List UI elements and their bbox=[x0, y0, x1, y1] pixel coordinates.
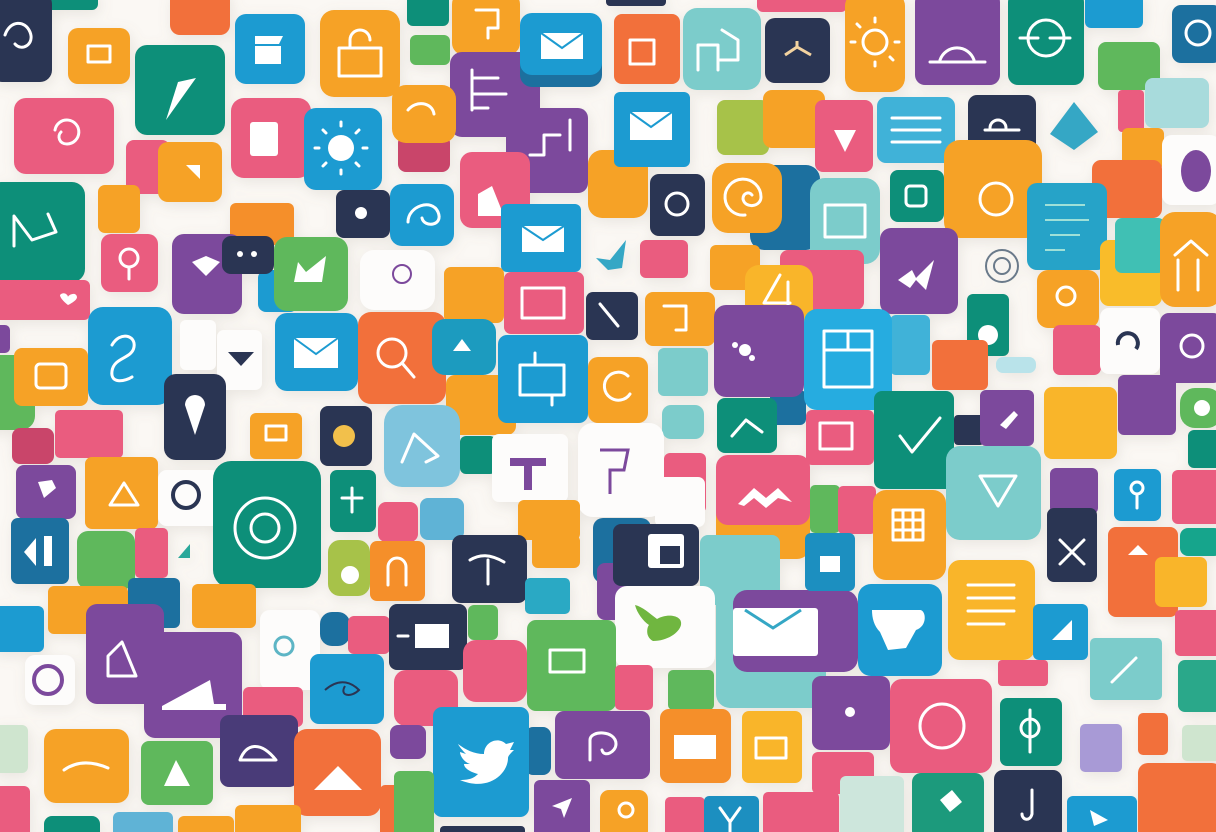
tile: dark blue back 2 bbox=[770, 390, 806, 425]
tile: orange columns bbox=[1160, 212, 1216, 307]
tile: orange building bbox=[444, 267, 504, 323]
tile: orange arch bbox=[370, 541, 425, 601]
tile: green bottom bbox=[394, 771, 434, 832]
tile: teal light 2 bbox=[662, 405, 704, 439]
tile: white spiral bbox=[1100, 308, 1160, 374]
tile: orange spiral bbox=[712, 163, 782, 233]
tile: purple list bbox=[450, 52, 540, 137]
tile: white molecule bbox=[260, 610, 320, 690]
tile: green check large bbox=[874, 391, 954, 489]
tile: pink doc bbox=[231, 98, 311, 178]
tile: blue mail bbox=[520, 13, 602, 87]
tile: white arrow bbox=[655, 477, 705, 527]
tile: blue swirl 3 bbox=[310, 654, 384, 724]
tile: blue swirl large bbox=[88, 307, 172, 405]
tile: white hammer bbox=[492, 434, 568, 502]
tile: yellow right bbox=[1155, 557, 1207, 607]
tile: white ring bbox=[158, 470, 220, 526]
tile: purple ship bbox=[144, 632, 242, 738]
tile: purple arc bbox=[915, 0, 1000, 85]
tile: orange small bbox=[763, 90, 825, 148]
tile: blue back bbox=[258, 270, 298, 312]
tile: navy pin bbox=[164, 374, 226, 460]
tile: navy hanger bbox=[765, 18, 830, 83]
tile: green small 11 bbox=[668, 670, 714, 710]
tile: green message bbox=[1098, 42, 1160, 90]
tile: yellow curl bbox=[392, 85, 456, 143]
tile: purple wifi bbox=[172, 234, 242, 314]
tile: orange chest bbox=[14, 348, 88, 406]
tile: navy swirl bbox=[0, 0, 52, 82]
tile: pale left edge bbox=[0, 725, 28, 773]
tile: orange right bbox=[1108, 527, 1178, 617]
tile: twitter bird bbox=[433, 707, 529, 817]
tile: orange card 2 bbox=[660, 709, 731, 783]
tile: light teal triangle bbox=[946, 446, 1041, 540]
tile: navy tree bbox=[452, 535, 527, 603]
tile: light blue back bbox=[890, 315, 930, 375]
tile: green edge 2 bbox=[1178, 660, 1216, 712]
tile: purple chart bbox=[506, 108, 588, 193]
tile: purple tower bbox=[86, 604, 164, 704]
tile: pink back 2 bbox=[780, 250, 864, 310]
tile: pale blue small bbox=[420, 498, 464, 540]
icon: teal bird bbox=[596, 240, 626, 270]
tile: blue swirl bbox=[390, 184, 454, 246]
tile: dark blue back 3 bbox=[525, 727, 551, 775]
tile: teal bottom bbox=[44, 816, 100, 832]
tile: pink flat 2 bbox=[812, 752, 874, 794]
tile: pink back 3 bbox=[664, 453, 706, 513]
tile: blue sun bbox=[304, 108, 382, 190]
tile: teal small square bbox=[890, 170, 944, 222]
tile: pink cart bbox=[1053, 325, 1101, 375]
tile: green tiny bbox=[468, 605, 498, 640]
tile: light blue shape bbox=[384, 405, 460, 487]
tile: orange behind right bbox=[1100, 240, 1162, 306]
tile: navy toy bbox=[320, 406, 372, 466]
tile: small green bbox=[410, 35, 450, 65]
tile: red tile bbox=[1092, 160, 1162, 218]
tile: orange pink trend bbox=[716, 455, 810, 559]
tile: yellow dots bbox=[1044, 387, 1117, 459]
tile: orange bottom 2 bbox=[235, 805, 301, 832]
tile: purple ear bbox=[555, 711, 650, 779]
tile: orange tiny bbox=[1138, 713, 1168, 755]
tile: teal edge 2 bbox=[1180, 528, 1216, 556]
tile: purple pen bbox=[980, 390, 1034, 446]
tile: navy bottom bbox=[440, 826, 525, 832]
tile: pink left edge bbox=[0, 786, 30, 832]
tile: orange flat bbox=[48, 586, 128, 634]
tile: blue triangle bbox=[432, 319, 496, 375]
tile: orange bird bbox=[588, 150, 648, 218]
tile: blue pin small bbox=[1114, 469, 1161, 521]
tile: blue bottom y bbox=[704, 796, 759, 832]
tile: pale blue slim bbox=[996, 357, 1036, 373]
tile: pink pin 2 bbox=[463, 640, 527, 702]
tile: teal phi bbox=[1000, 698, 1062, 766]
tile: teal shape bbox=[0, 182, 85, 282]
tile: pale edge bbox=[1182, 725, 1216, 761]
tile: orange label bbox=[230, 203, 294, 245]
tile: teal circle bbox=[1008, 0, 1084, 85]
tile: pink rectangle bbox=[640, 240, 688, 278]
tile: orange bottom bbox=[178, 816, 234, 832]
tile: blue edge bbox=[0, 606, 44, 652]
tile: orange factory bbox=[742, 711, 802, 783]
tile: light teal browser bbox=[810, 178, 880, 264]
tile: pink slim bbox=[1118, 90, 1144, 132]
tile: orange hook bbox=[452, 0, 520, 55]
tile: navy window bbox=[613, 524, 699, 586]
tile: orange small 2 bbox=[98, 185, 140, 233]
tile: teal dot bbox=[967, 294, 1009, 356]
tile: pink flat 3 bbox=[998, 660, 1048, 686]
tile: orange lock bbox=[320, 10, 400, 97]
tile: pale purple bbox=[1080, 724, 1122, 772]
tile: blue behind window bbox=[593, 518, 651, 583]
tile: blue table bbox=[804, 309, 892, 410]
tile: orange search large bbox=[358, 312, 446, 404]
tile: top edge green bbox=[42, 0, 98, 10]
tile: purple bolt bbox=[880, 228, 958, 314]
tile: blue ring bbox=[1172, 5, 1216, 63]
tile: light teal eye bbox=[658, 348, 708, 396]
tile: navy blob bbox=[320, 612, 350, 646]
tile: pink slanted bbox=[55, 410, 123, 458]
tile: orange card bbox=[68, 28, 130, 84]
tile: blue plan bbox=[498, 335, 588, 423]
icon: grey spiral bbox=[986, 250, 1018, 282]
tile: navy top bbox=[606, 0, 666, 6]
tile: white triangle bbox=[217, 330, 262, 390]
tile: navy tools bbox=[1047, 508, 1097, 582]
tile: green yoga bbox=[717, 100, 769, 155]
tile: navy mail bbox=[389, 604, 467, 670]
tile: navy knife bbox=[586, 292, 638, 340]
tile: blue top right bbox=[1085, 0, 1143, 28]
tile: teal pen bbox=[135, 45, 225, 135]
icon: purple circle bbox=[25, 655, 75, 705]
tile: pink right bbox=[1172, 470, 1216, 524]
tile: pink house bbox=[460, 152, 530, 228]
tile: orange flat 2 bbox=[192, 584, 256, 628]
tile: white doodle bbox=[360, 250, 435, 310]
tile: orange triangle bbox=[158, 142, 222, 202]
tile: green arch bbox=[77, 531, 135, 589]
tile: green slim bbox=[810, 485, 840, 533]
tile: blue small bbox=[525, 578, 570, 614]
tile: purple mail bbox=[733, 590, 858, 672]
tile: navy dots bbox=[222, 236, 274, 274]
tile: light teal mail base bbox=[700, 535, 826, 708]
tile: light teal home bbox=[1145, 78, 1209, 128]
tile: pale bottom bbox=[840, 776, 904, 832]
tile: orange behind bbox=[1122, 128, 1164, 168]
tile: orange house bbox=[614, 14, 680, 84]
tile: pink spiral bbox=[14, 98, 114, 174]
tile: navy apple bbox=[336, 190, 390, 238]
tile: blue hand bbox=[805, 533, 855, 591]
tile: pink browser bbox=[806, 410, 874, 465]
tile: light teal arrow bbox=[1115, 218, 1165, 273]
tile: teal cross bbox=[330, 470, 376, 532]
tile: green oval bbox=[1180, 388, 1216, 428]
tile: dark blue back bbox=[750, 165, 820, 250]
tile: green cart bbox=[527, 620, 616, 711]
tile: blue folder bbox=[235, 14, 305, 84]
tile: navy fruit bbox=[650, 174, 705, 236]
tile: yellow number bbox=[745, 265, 813, 327]
tile: pink pin bbox=[101, 234, 158, 292]
tile: orange flame bbox=[1138, 763, 1216, 832]
tile: purple edge bbox=[0, 325, 10, 353]
tile: blue stack bbox=[877, 97, 955, 163]
tile: navy pot bbox=[220, 715, 298, 787]
tile: pink bottom bbox=[665, 797, 705, 832]
tile: purple small 5 bbox=[1050, 468, 1098, 514]
tile: pink cone bbox=[815, 100, 873, 172]
tile: green edge bbox=[0, 355, 35, 430]
tile: orange letter c bbox=[588, 357, 648, 423]
tile: navy arrows bbox=[11, 518, 69, 584]
tile: blue triangle 2 bbox=[1033, 604, 1088, 660]
tile: orange behind 2 bbox=[446, 375, 516, 435]
tile: pink top bbox=[757, 0, 847, 12]
tile: purple gear bbox=[1160, 313, 1216, 383]
tile: teal diamond bottom bbox=[912, 773, 984, 832]
tile: orange top bbox=[170, 0, 230, 35]
tile: orange curve bbox=[44, 729, 129, 803]
tile: navy small 8 bbox=[128, 578, 180, 628]
tile: orange small 4 bbox=[932, 340, 988, 390]
tile: pink back bbox=[126, 140, 170, 194]
tile: teal diamond bbox=[1050, 102, 1098, 150]
tile: orange small 3 bbox=[710, 245, 760, 290]
tile: purple plain bbox=[1118, 375, 1176, 435]
tile: orange s bbox=[518, 500, 580, 568]
tile: red emblem bbox=[890, 679, 992, 773]
tile: white egg bbox=[1162, 135, 1216, 205]
tile: red mountain bbox=[294, 729, 381, 816]
tile: pink small 6 bbox=[135, 528, 168, 578]
icon: teal arrow bbox=[178, 544, 190, 558]
tile: pink small 10 bbox=[615, 665, 653, 710]
tile: green triangle bbox=[141, 741, 213, 805]
tile: orange ring bbox=[944, 140, 1042, 238]
tile: blue mail 3 bbox=[501, 204, 581, 272]
tile: yellow lines bbox=[948, 560, 1035, 660]
tile: purple tiny bbox=[390, 725, 426, 759]
tile: small teal bbox=[407, 0, 449, 26]
tile: blue list bbox=[1027, 183, 1107, 270]
tile: purple pin bbox=[16, 465, 76, 519]
tile: pink small 9 bbox=[348, 616, 390, 654]
tile: pink swirl bbox=[394, 670, 458, 726]
tile: blue mail 4 bbox=[275, 313, 358, 391]
tile: white plant bbox=[615, 586, 715, 668]
tile: purple bubble bbox=[812, 676, 890, 750]
tile: pink bottom 2 bbox=[763, 792, 839, 832]
tile: green blob bbox=[328, 540, 370, 596]
tile: blue mug bbox=[858, 584, 942, 676]
tile: purple molecule bbox=[714, 305, 804, 397]
tile: pink edge bbox=[1175, 610, 1216, 656]
tile: navy swirl small bbox=[968, 95, 1036, 155]
tile: pink small 7 bbox=[378, 502, 418, 542]
tile: navy small 3 bbox=[954, 415, 984, 445]
tile: teal edge bbox=[1188, 430, 1216, 468]
tile: white small bbox=[180, 320, 216, 370]
tile: light teal brush bbox=[1090, 638, 1162, 700]
tile: pink slim 2 bbox=[838, 486, 876, 534]
tile: blue triangle bottom bbox=[1067, 796, 1137, 832]
tile: pink picture bbox=[504, 272, 584, 334]
tile: light teal house bbox=[683, 8, 761, 90]
tile: pink flower bbox=[12, 428, 54, 464]
tile: green check bbox=[274, 237, 348, 311]
tile: teal pencil bbox=[717, 398, 777, 453]
tile: purple arrow bbox=[534, 780, 590, 832]
tile: orange sun bbox=[845, 0, 905, 92]
tile: navy hook bbox=[994, 770, 1062, 832]
tile: orange tent bbox=[85, 457, 158, 529]
tile: orange grid bbox=[873, 490, 946, 580]
tile: teal spiral large bbox=[213, 461, 321, 588]
tile: yellow layout bbox=[645, 292, 715, 346]
tile: orange search bbox=[1037, 270, 1099, 328]
tile: red slim bottom bbox=[380, 785, 402, 832]
tile: purple behind bbox=[597, 563, 647, 620]
tile: white letter bbox=[578, 423, 664, 517]
tile: teal small 3 bbox=[460, 436, 496, 474]
tile: blue mail 2 bbox=[614, 92, 690, 167]
tile: pink heart bbox=[0, 280, 90, 320]
tile: maroon small bbox=[398, 135, 450, 172]
tile: orange magnifier bbox=[600, 790, 648, 832]
tile: orange square bbox=[250, 413, 302, 459]
tile: blue bottom bbox=[113, 812, 173, 832]
tile: pink flat bbox=[243, 687, 303, 727]
